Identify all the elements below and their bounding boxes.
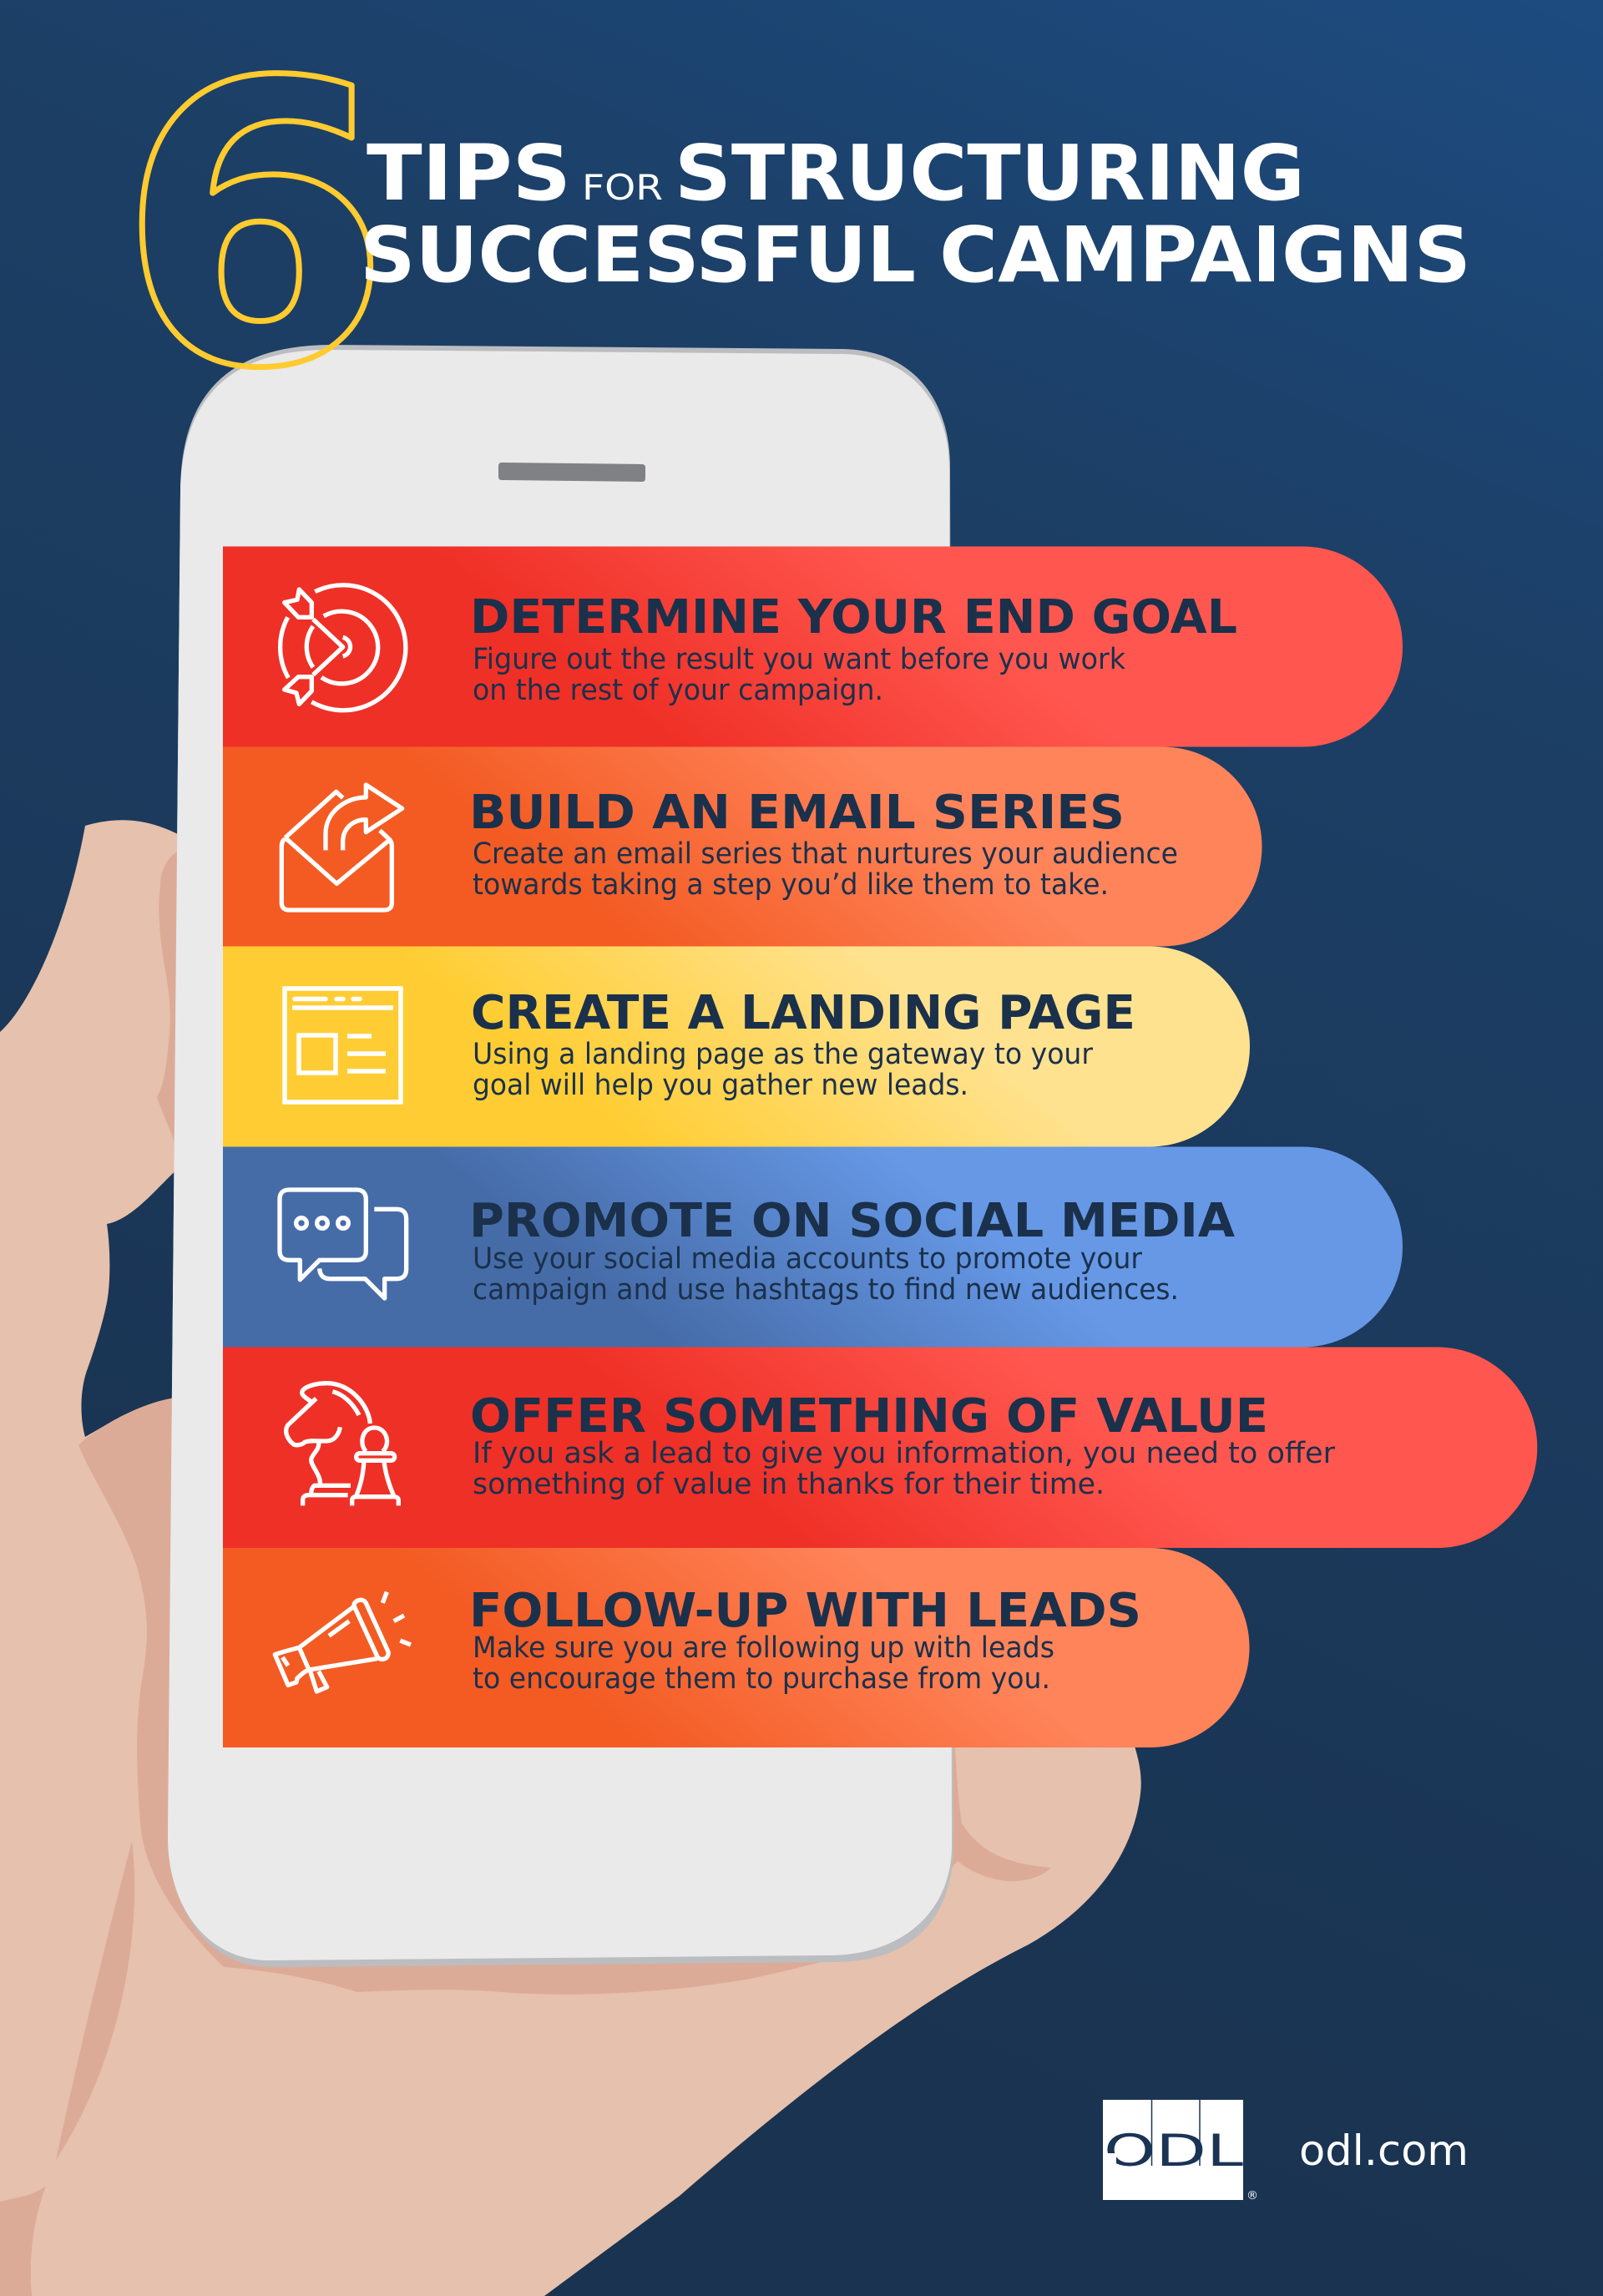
title line 1: TIPS <box>367 129 571 218</box>
icon: open envelope with arrow <box>281 785 402 910</box>
hand: thumb fold shadow <box>950 1747 1051 1881</box>
description: something of value in thanks for their time. <box>473 1468 1105 1501</box>
description: Create an email series that nurtures your audience <box>473 837 1178 871</box>
description: campaign and use hashtags to find new audiences. <box>473 1273 1179 1307</box>
phone: face <box>168 350 952 1960</box>
description: Use your social media accounts to promote your <box>473 1242 1143 1276</box>
panel: tip 4 <box>223 1147 1403 1348</box>
title line 2: SUCCESSFUL <box>360 210 916 300</box>
hand: palm shadow under phone <box>78 1398 839 1995</box>
description <box>473 1038 1094 1102</box>
bar <box>223 1548 1249 1747</box>
heading: FOLLOW-UP WITH LEADS <box>469 1584 1141 1638</box>
icon: chess knight and pawn <box>286 1383 398 1505</box>
description <box>473 837 1178 902</box>
description: goal will help you gather new leads. <box>473 1069 968 1102</box>
title <box>360 129 1471 300</box>
description: Using a landing page as the gateway to your <box>473 1038 1094 1071</box>
hand: wrist shadow <box>0 2186 46 2296</box>
heading: BUILD AN EMAIL SERIES <box>469 786 1125 840</box>
heading: CREATE A LANDING PAGE <box>471 986 1135 1040</box>
phone: speaker <box>498 463 645 482</box>
heading: PROMOTE ON SOCIAL MEDIA <box>469 1194 1236 1248</box>
heading: OFFER SOMETHING OF VALUE <box>470 1389 1268 1444</box>
description: towards taking a step you’d like them to take. <box>473 868 1109 902</box>
logo: ODL <box>1103 2100 1258 2202</box>
icon: megaphone <box>275 1592 411 1692</box>
website: odl.com <box>1299 2127 1469 2175</box>
panel: tip 2 <box>223 746 1262 947</box>
heading: DETERMINE YOUR END GOAL <box>470 590 1237 645</box>
icon: target with arrows <box>281 585 406 711</box>
description: Figure out the result you want before you work <box>473 643 1126 676</box>
logo: ODL: ® <box>1246 2189 1258 2202</box>
description <box>473 1631 1054 1696</box>
description: on the rest of your campaign. <box>473 674 883 707</box>
phone: back edge <box>168 345 953 1967</box>
logo: ODL: ODL <box>1104 2126 1244 2177</box>
hand: skin <box>0 820 1141 2296</box>
title line 1 <box>367 129 1305 218</box>
bar <box>223 746 1262 947</box>
icon: landing page <box>285 989 401 1102</box>
bar <box>223 1348 1537 1548</box>
big outlined number 6: 6 <box>118 0 392 453</box>
panel: tip 5 <box>223 1348 1537 1548</box>
description: Make sure you are following up with leads <box>473 1631 1054 1665</box>
description <box>473 643 1126 707</box>
illustration: hand holding phone <box>0 345 1141 2296</box>
title line 2: CAMPAIGNS <box>939 210 1471 300</box>
icon: speech bubbles <box>280 1190 407 1298</box>
bar <box>223 947 1250 1147</box>
panel: tip 1 <box>223 546 1403 746</box>
description <box>473 1437 1336 1501</box>
bar <box>223 546 1403 746</box>
description: to encourage them to purchase from you. <box>473 1662 1050 1696</box>
panel: tip 6 <box>223 1548 1249 1747</box>
title line 2 <box>360 210 1471 300</box>
panel: tip 3 <box>223 947 1250 1147</box>
description <box>473 1242 1179 1307</box>
title line 1: FOR <box>582 167 663 208</box>
bar <box>223 1147 1403 1348</box>
title line 1: STRUCTURING <box>675 129 1305 218</box>
description: If you ask a lead to give you information, you need to offer <box>473 1437 1336 1470</box>
hand: palm crease <box>56 1841 134 2160</box>
hand: finger shadow upper <box>157 852 180 1143</box>
